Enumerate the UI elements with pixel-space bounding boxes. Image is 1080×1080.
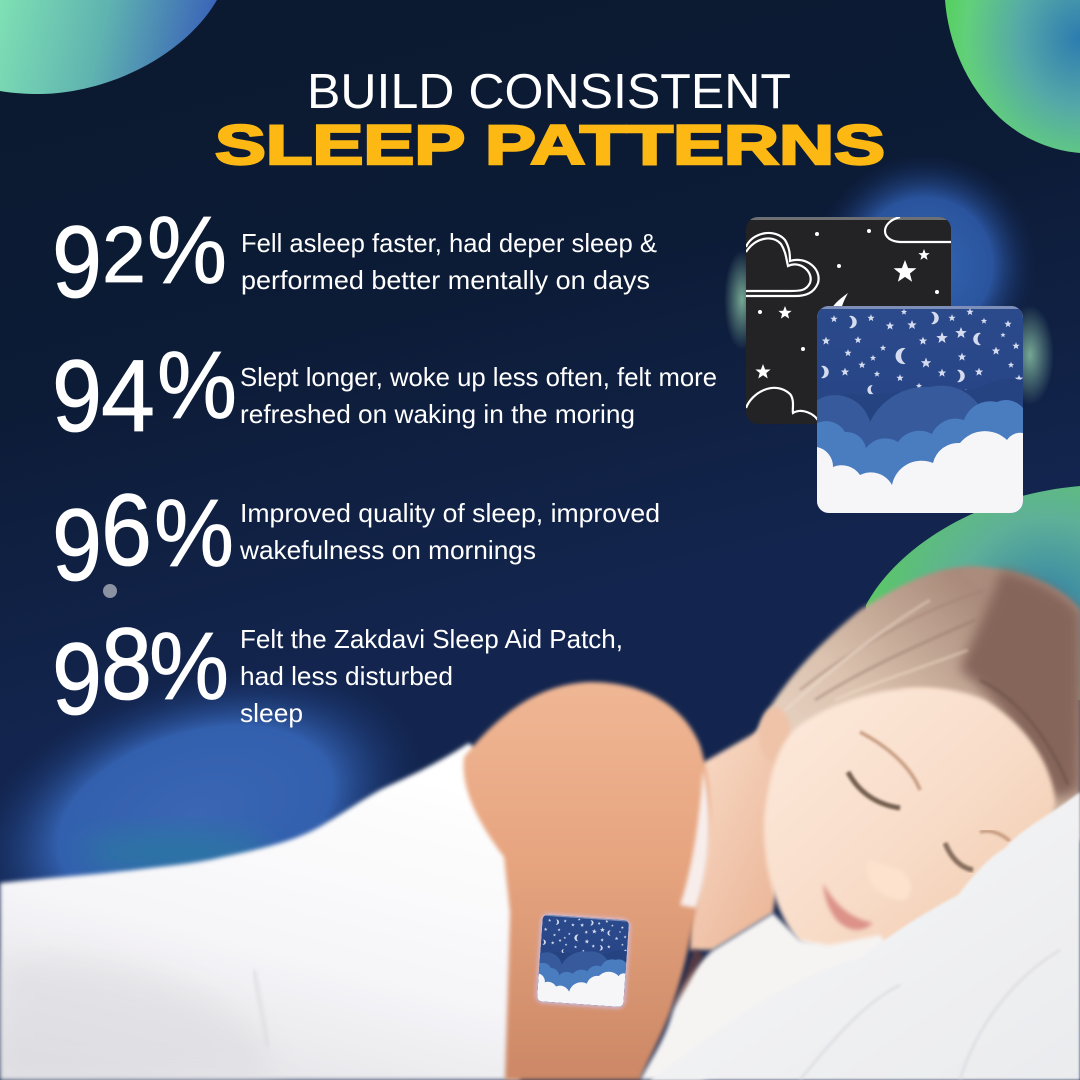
arm — [463, 682, 710, 1080]
eyebrow right — [980, 831, 1010, 841]
corner blob: top right — [945, 0, 1080, 153]
description: Improved quality of sleep, improved — [240, 498, 660, 528]
title — [215, 65, 885, 176]
description: Slept longer, woke up less often, felt more — [240, 362, 717, 392]
glow around arm patch — [535, 913, 631, 1009]
stat: 92%: 9 — [52, 205, 102, 319]
stat: 94%: 4 — [101, 339, 155, 453]
stat: 92%: % — [147, 197, 227, 304]
stat: 94%: 9 — [52, 339, 102, 453]
photo: sleeping woman — [0, 566, 1080, 1080]
product: dark patch — [746, 217, 951, 424]
eyebrow — [860, 732, 920, 790]
stat: 98% — [52, 607, 623, 736]
description: had less disturbed — [240, 661, 453, 691]
hair part — [960, 570, 1080, 800]
torso sheet — [0, 743, 530, 1080]
shadow by arm — [674, 948, 704, 1008]
stat: 96% — [52, 473, 660, 602]
description: Felt the Zakdavi Sleep Aid Patch, — [240, 624, 623, 654]
stat: 96%: 9 — [52, 488, 102, 602]
description: performed better mentally on days — [241, 265, 650, 295]
title line 2: SLEEP PATTERNS — [215, 113, 885, 176]
lips — [823, 883, 873, 930]
description: Fell asleep faster, had deper sleep & — [241, 228, 657, 258]
description — [240, 624, 623, 728]
product: blue patch — [817, 306, 1023, 513]
glow: lower left — [0, 614, 460, 1016]
eyelash left — [848, 772, 900, 808]
pillow folds — [800, 950, 1060, 1080]
ear — [759, 707, 791, 763]
stat: 92%: 2 — [102, 210, 146, 299]
stat: 92% — [52, 197, 657, 319]
description: sleep — [240, 698, 303, 728]
decorative dot — [103, 584, 117, 598]
pillow — [650, 792, 1080, 1080]
description: wakefulness on mornings — [239, 535, 536, 565]
hair streaks — [780, 590, 1068, 785]
glow: behind patches — [724, 153, 1054, 405]
top strap — [680, 770, 709, 908]
neck — [690, 730, 800, 950]
description: refreshed on waking in the moring — [240, 399, 635, 429]
sheet shadow lower left — [0, 958, 276, 1080]
description — [239, 498, 660, 565]
description — [240, 362, 717, 429]
product: patch on arm — [537, 914, 629, 1007]
nose — [867, 860, 911, 900]
description — [241, 228, 657, 295]
stat: 98%: % — [149, 613, 229, 720]
eyelash right — [945, 843, 973, 870]
sheet under chin — [640, 913, 920, 1080]
hair — [750, 566, 1080, 860]
face — [764, 688, 1055, 952]
stat: 94%: % — [157, 332, 237, 439]
corner blob: right middle — [866, 486, 1080, 700]
stat: 98%: 9 — [52, 622, 102, 736]
stat: 96%: 6 — [101, 473, 152, 587]
stat: 96%: % — [154, 480, 234, 587]
corner blob: top left — [0, 0, 217, 94]
stat: 94% — [52, 332, 717, 453]
title line 1: BUILD CONSISTENT — [307, 65, 791, 119]
stat: 98%: 8 — [101, 607, 152, 721]
blonde strand — [900, 689, 1048, 825]
sheet fold — [254, 970, 268, 1047]
